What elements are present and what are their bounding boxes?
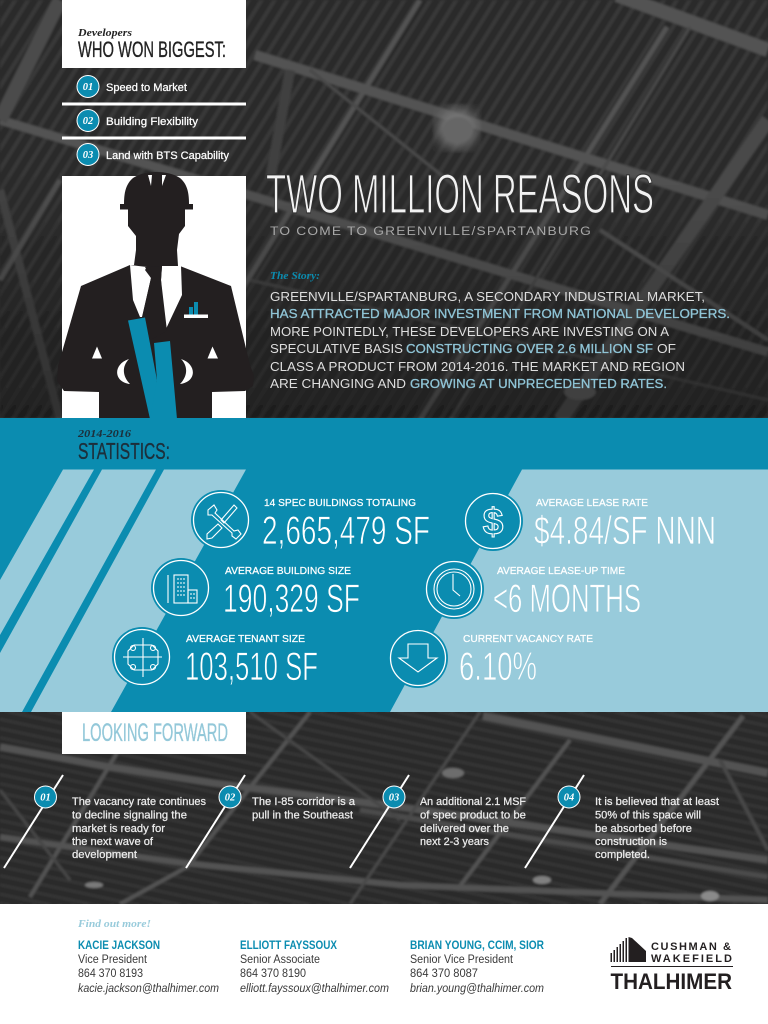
stat: total size [191,490,430,553]
text block: the story: MORE POINTEDLY, THESE DEVELOPERS ARE INVESTING ON A [270,325,670,339]
contact: Kacie Jackson: KACIE JACKSON [78,940,160,952]
icon: clock [424,559,484,619]
forward item 04 [525,775,719,868]
stat: building size: AVERAGE BUILDING SIZE [225,565,351,577]
contact: Elliott Fayssoux: 864 370 8190 [240,968,306,980]
blueprint rolls [128,318,177,419]
list item 03: Land with BTS Capability [106,150,229,162]
stat: lease-up time [424,559,641,621]
panel: who won biggest [62,0,246,166]
logo: Cushman & Wakefield Thalhimer: CUSHMAN & [651,941,731,953]
panel: developer illustration [57,172,254,419]
contact: Kacie Jackson: 864 370 8193 [78,968,143,980]
list item 01: 01 [83,82,93,93]
contact: Kacie Jackson: Vice President [78,954,148,966]
silhouette: suit [57,209,254,419]
contact: Elliott Fayssoux: ELLIOTT FAYSSOUX [240,940,337,952]
stat: vacancy rate: 6.10% [459,645,537,689]
forward item 03: of spec product to be [420,810,526,822]
logo: Cushman & Wakefield Thalhimer [610,937,733,994]
icon: tools [191,490,251,550]
stat: tenant size: AVERAGE TENANT SIZE [186,633,305,645]
contact: Brian Young: Senior Vice President [410,954,514,966]
icon: dollar [463,491,523,551]
forward item 02: The I-85 corridor is a [252,796,356,808]
forward item 03: An additional 2.1 MSF [420,796,526,808]
text block: the story: CLASS A PRODUCT FROM 2014-2016. THE MARKET AND REGION [270,360,685,374]
stat: tenant size [112,627,318,689]
stat: vacancy rate [388,628,593,689]
panel: footer contacts [0,904,768,1024]
contact: Kacie Jackson [78,940,219,995]
forward item 02: 02 [225,792,236,804]
forward item 01: to decline signaling the [72,810,187,822]
forward item 03: 03 [389,792,399,804]
text block: the story: GREENVILLE/SPARTANBURG, A SECONDARY INDUSTRIAL MARKET, [270,290,705,304]
logo: Cushman & Wakefield Thalhimer: WAKEFIELD [651,953,732,965]
contact: Brian Young [410,940,545,995]
forward item 02: pull in the Southeast [252,810,353,822]
contact: Brian Young: BRIAN YOUNG, CCIM, SIOR [410,940,545,952]
forward item 01: the next wave of [72,836,154,848]
forward item 01: development [72,849,137,861]
panel: looking forward heading [62,712,246,754]
stat: building size: 190,329 SF [223,577,360,621]
forward item 04: It is believed that at least [595,796,719,808]
list item 02: 02 [83,116,94,127]
forward item 01: The vacancy rate continues [72,796,206,808]
contact: Kacie Jackson: kacie.jackson@thalhimer.com [78,983,219,995]
forward item 04: completed. [595,849,650,861]
forward item 03: delivered over the [420,823,509,835]
panel: looking forward heading: LOOKING FORWARD [82,719,228,747]
icon: hard hat [120,172,193,210]
forward item 03: next 2-3 years [420,836,489,848]
forward item 01 [4,775,206,868]
text block: the story: HAS ATTRACTED MAJOR INVESTMENT FROM NATIONAL DEVELOPERS. [270,307,730,321]
stat: lease-up time: <6 MONTHS [493,577,641,621]
stat: total size: 2,665,479 SF [262,509,430,553]
contact: Brian Young: 864 370 8087 [410,968,478,980]
forward item 03 [350,775,526,868]
heading: statistics [77,429,170,464]
heading: who won biggest: WHO WON BIGGEST: [78,37,226,62]
forward item 04: 50% of this space will [595,810,701,822]
stat: lease-up time: AVERAGE LEASE-UP TIME [497,565,625,577]
list item 02 [77,110,199,132]
text block: the story: GROWING AT UNPRECEDENTED RATES. [410,377,667,391]
logo: Cushman & Wakefield Thalhimer: THALHIMER [610,969,732,994]
icon: down arrow [388,628,448,688]
diagonal stripes [0,470,768,712]
contact: Elliott Fayssoux: Senior Associate [240,954,320,966]
contact: Brian Young: brian.young@thalhimer.com [410,983,544,995]
forward item 04: construction is [595,836,668,848]
forward item 01: market is ready for [72,823,165,835]
icon: dollar: $ [483,501,504,542]
text block: the story: The Story: [270,271,320,282]
icon: floor plan [112,627,172,687]
heading: statistics: 2014-2016 [77,429,132,440]
jacket details [92,346,218,384]
list item 03 [77,144,229,166]
text block: the story: CONSTRUCTING OVER 2.6 MILLION SF [406,342,653,356]
label: find out more: Find out more! [77,919,151,930]
forward item 04: 04 [564,792,574,804]
stat: tenant size: 103,510 SF [185,645,318,689]
text block: the story: OF [657,342,676,356]
list item 02: Building Flexibility [106,116,199,128]
stat: total size: 14 SPEC BUILDINGS TOTALING [264,497,416,509]
stat: lease rate: AVERAGE LEASE RATE [536,497,648,509]
text block: the story [270,271,730,391]
forward item 01: 01 [40,792,51,804]
icon: pocket bar chart [184,302,208,318]
list item 01 [77,76,187,98]
forward item 04: be absorbed before [595,823,692,835]
stat: vacancy rate: CURRENT VACANCY RATE [463,633,593,645]
stat: building size [151,558,360,621]
contact: Elliott Fayssoux: elliott.fayssoux@thalhimer.com [240,983,389,995]
text block: the story: ARE CHANGING AND [270,377,406,391]
stat: lease rate [463,491,716,553]
label: developers: Developers [77,27,132,39]
subtitle: TO COME TO GREENVILLE/SPARTANBURG [270,226,592,238]
forward item 02 [186,775,356,868]
panel: statistics [0,418,768,712]
contact: Elliott Fayssoux [240,940,389,995]
icon: buildings [151,558,211,618]
heading: statistics: STATISTICS: [78,438,170,464]
list item 01: Speed to Market [106,82,187,94]
text block: the story: SPECULATIVE BASIS [270,342,403,356]
list item 03: 03 [83,150,93,161]
